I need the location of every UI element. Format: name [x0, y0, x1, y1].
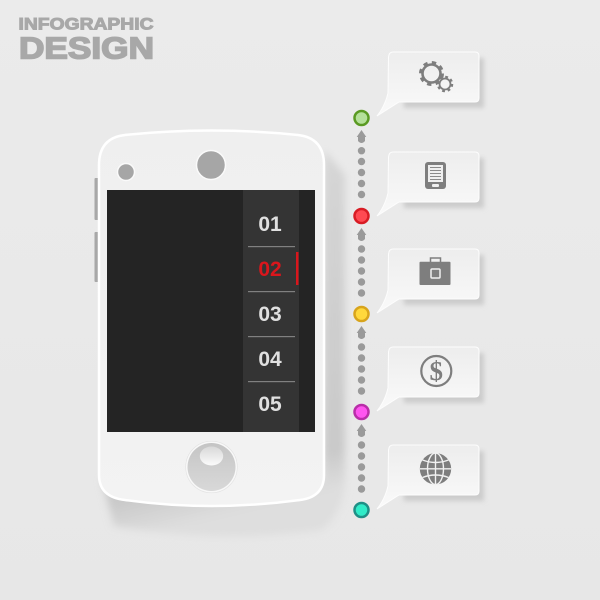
menu numbers: 04	[258, 348, 282, 371]
menu numbers	[258, 213, 282, 416]
title	[18, 14, 154, 66]
menu numbers: 03	[258, 303, 282, 326]
menu numbers: 02	[258, 258, 282, 281]
menu numbers: 01	[258, 213, 282, 236]
menu column	[243, 190, 299, 432]
icon: tablet	[425, 162, 446, 189]
callout: tablet	[377, 152, 484, 216]
icon: globe	[420, 453, 451, 484]
camera large	[196, 150, 226, 180]
timeline nodes	[354, 111, 368, 517]
icon: dollar: $	[430, 356, 443, 386]
callout: gears	[377, 52, 484, 116]
arrow 2	[357, 228, 366, 297]
callout: globe	[377, 445, 484, 509]
phone side buttons	[94, 178, 100, 282]
callout: briefcase	[377, 249, 484, 313]
arrow 1	[357, 130, 366, 198]
menu dividers	[248, 246, 295, 382]
icon: gears	[420, 62, 452, 91]
screen	[107, 190, 315, 432]
callout: dollar	[377, 347, 484, 411]
camera small	[118, 164, 134, 180]
phone body	[99, 130, 324, 506]
title: DESIGN	[19, 30, 154, 66]
title: INFOGRAPHIC	[18, 14, 154, 34]
icon: briefcase	[420, 258, 450, 285]
active marker	[296, 252, 298, 285]
menu numbers: 05	[258, 393, 282, 416]
home button	[186, 441, 237, 493]
timeline connectors	[357, 130, 366, 493]
phone drop shadow	[102, 150, 345, 536]
arrow 3	[357, 326, 366, 395]
arrow 4	[357, 424, 366, 493]
